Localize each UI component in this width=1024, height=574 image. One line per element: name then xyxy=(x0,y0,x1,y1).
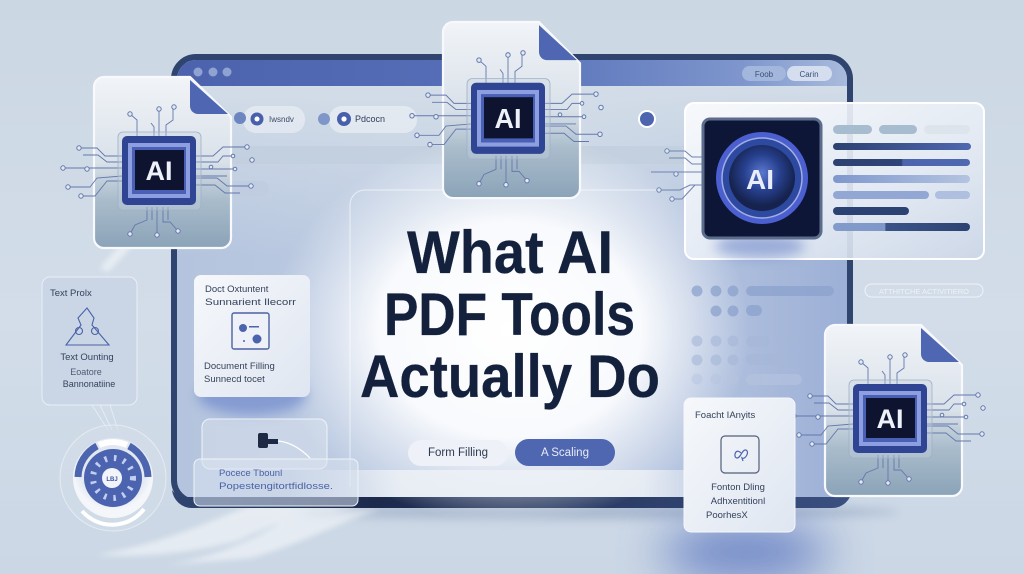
document card: bottom right: AI xyxy=(876,404,904,434)
browser bottom frame band xyxy=(172,490,852,508)
blue glow beneath chip xyxy=(715,234,805,258)
panel: Text Prolx card: Text Ounting xyxy=(60,352,114,363)
centre content panel outline xyxy=(350,190,675,487)
AI chip orb xyxy=(703,119,821,238)
panel: document summary card: Doct Oxtuntent xyxy=(205,284,269,295)
status dot xyxy=(638,110,656,128)
panel: Foscht Anyits card: Foacht IAnyits xyxy=(695,410,755,421)
header tab: Foob xyxy=(742,66,786,81)
document card: bottom right xyxy=(792,325,985,496)
floor blue glow xyxy=(660,526,830,574)
panel: process caption overlay: Pocece Tbounl xyxy=(219,468,282,479)
panel: Foscht Anyits card xyxy=(684,398,795,532)
nav pill: Iwsndv xyxy=(234,106,305,133)
document card: top left xyxy=(61,77,254,248)
centre white glow xyxy=(270,135,750,525)
icon: network triangle xyxy=(66,308,109,345)
text lines xyxy=(833,125,971,231)
header tab: Carin xyxy=(787,66,832,81)
panel: Text Prolx card: Text Prolx xyxy=(50,288,92,299)
pill: A Scaling xyxy=(515,439,615,466)
circuit traces xyxy=(651,149,703,201)
icon: circular dial: LBJ xyxy=(106,477,118,483)
panel: document summary card: Sunnarient Ilecorr xyxy=(205,297,296,308)
nav pill: Pdcocn xyxy=(318,106,417,133)
connector lines to dial xyxy=(92,405,118,430)
panel: Text Prolx card: Bannonatiine xyxy=(63,379,115,389)
outlined label pill: ATTHITCHE ACTIVITIERO xyxy=(879,287,969,296)
panel: Foscht Anyits card: Fonton Dling xyxy=(711,482,765,493)
pill: A Scaling: A Scaling xyxy=(541,447,589,459)
panel: process caption overlay: Popestengitortfidlosse. xyxy=(219,481,333,492)
panel: document summary card: Sunnecd tocet xyxy=(204,374,265,385)
document card: top left: AI xyxy=(146,156,172,186)
pill: Form Filling xyxy=(408,440,508,466)
icon: dots square xyxy=(232,313,269,349)
icon: loop square xyxy=(721,436,759,473)
right sidebar placeholder dots xyxy=(692,286,834,385)
light wave streaks xyxy=(95,228,380,565)
panel: Foscht Anyits card: Adhxentitionl xyxy=(711,496,765,507)
title: Actually Do xyxy=(360,343,660,410)
header tab: Foob: Foob xyxy=(755,70,774,79)
panel: Text Prolx card xyxy=(42,277,137,405)
title: What AI xyxy=(407,219,613,286)
nav pill: Iwsndv: Iwsndv xyxy=(269,115,294,124)
panel: Text Prolx card: Eoatore xyxy=(70,367,102,377)
panel: document summary card xyxy=(194,275,310,415)
nav pill: Pdcocn: Pdcocn xyxy=(355,114,385,124)
AI chip orb: AI xyxy=(746,164,774,195)
floor shadow under window xyxy=(300,505,900,519)
document card: top centre: AI xyxy=(495,103,521,134)
panel: plug card xyxy=(202,419,327,469)
panel: AI summary card xyxy=(651,103,984,259)
title: PDF Tools xyxy=(384,281,635,348)
pill: Form Filling: Form Filling xyxy=(428,447,488,459)
icon: plug xyxy=(258,433,310,458)
browser window xyxy=(172,57,852,508)
window control dots xyxy=(194,68,232,76)
panel: Foscht Anyits card: PoorhesX xyxy=(706,510,748,521)
document card: top centre xyxy=(410,22,603,198)
browser top area tint xyxy=(177,86,847,256)
panel: process caption overlay xyxy=(194,459,358,506)
lower window light band xyxy=(290,470,730,497)
header tab: Carin: Carin xyxy=(799,70,819,79)
panel: document summary card: Document Filling xyxy=(204,361,275,372)
title xyxy=(360,219,660,410)
icon: circular dial xyxy=(60,425,166,531)
browser header bar xyxy=(177,60,847,86)
sidebar placeholder bars xyxy=(177,146,847,196)
outlined label pill xyxy=(865,284,983,297)
